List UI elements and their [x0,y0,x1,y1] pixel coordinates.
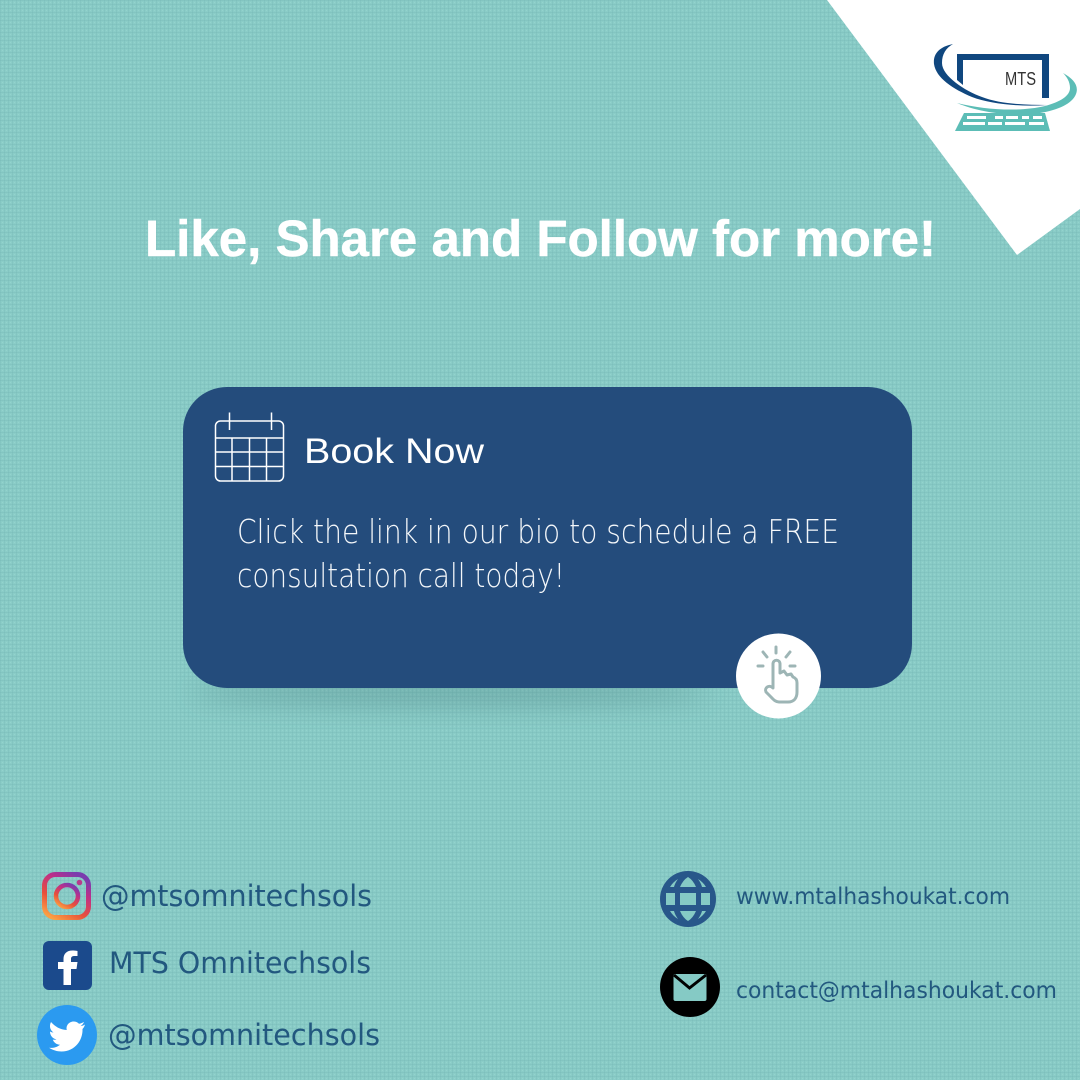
white corner shape [827,0,1080,255]
logo: MTS: MTS [1005,69,1036,89]
logo: MTS [934,44,1077,131]
twitter handle: @mtsomnitechsols [108,1018,380,1052]
facebook name: MTS Omnitechsols [109,946,371,980]
title: Like, Share and Follow for more! [145,210,936,267]
instagram handle: @mtsomnitechsols [101,879,372,913]
contact: email [660,957,1057,1017]
icon: envelope [660,957,720,1017]
body text: Click the link in our bio to schedule a FREE [237,512,839,551]
body text [237,512,839,595]
icon: tap button [736,634,821,718]
website url: www.mtalhashoukat.com [736,884,1010,910]
social: instagram [44,874,372,918]
icon: twitter [37,1005,97,1065]
email address: contact@mtalhashoukat.com [736,978,1057,1004]
icon: facebook [43,941,92,990]
heading: book now: Book Now [304,432,485,471]
social: twitter [37,1005,380,1065]
social: facebook [43,941,371,990]
panel: book now card [183,387,912,718]
body text: consultation call today! [237,556,565,595]
icon: instagram [44,874,88,918]
card shadow [190,678,710,706]
icon: calendar [216,412,284,481]
icon: globe [660,871,716,927]
card background [183,387,912,688]
contact: website [660,871,1010,927]
